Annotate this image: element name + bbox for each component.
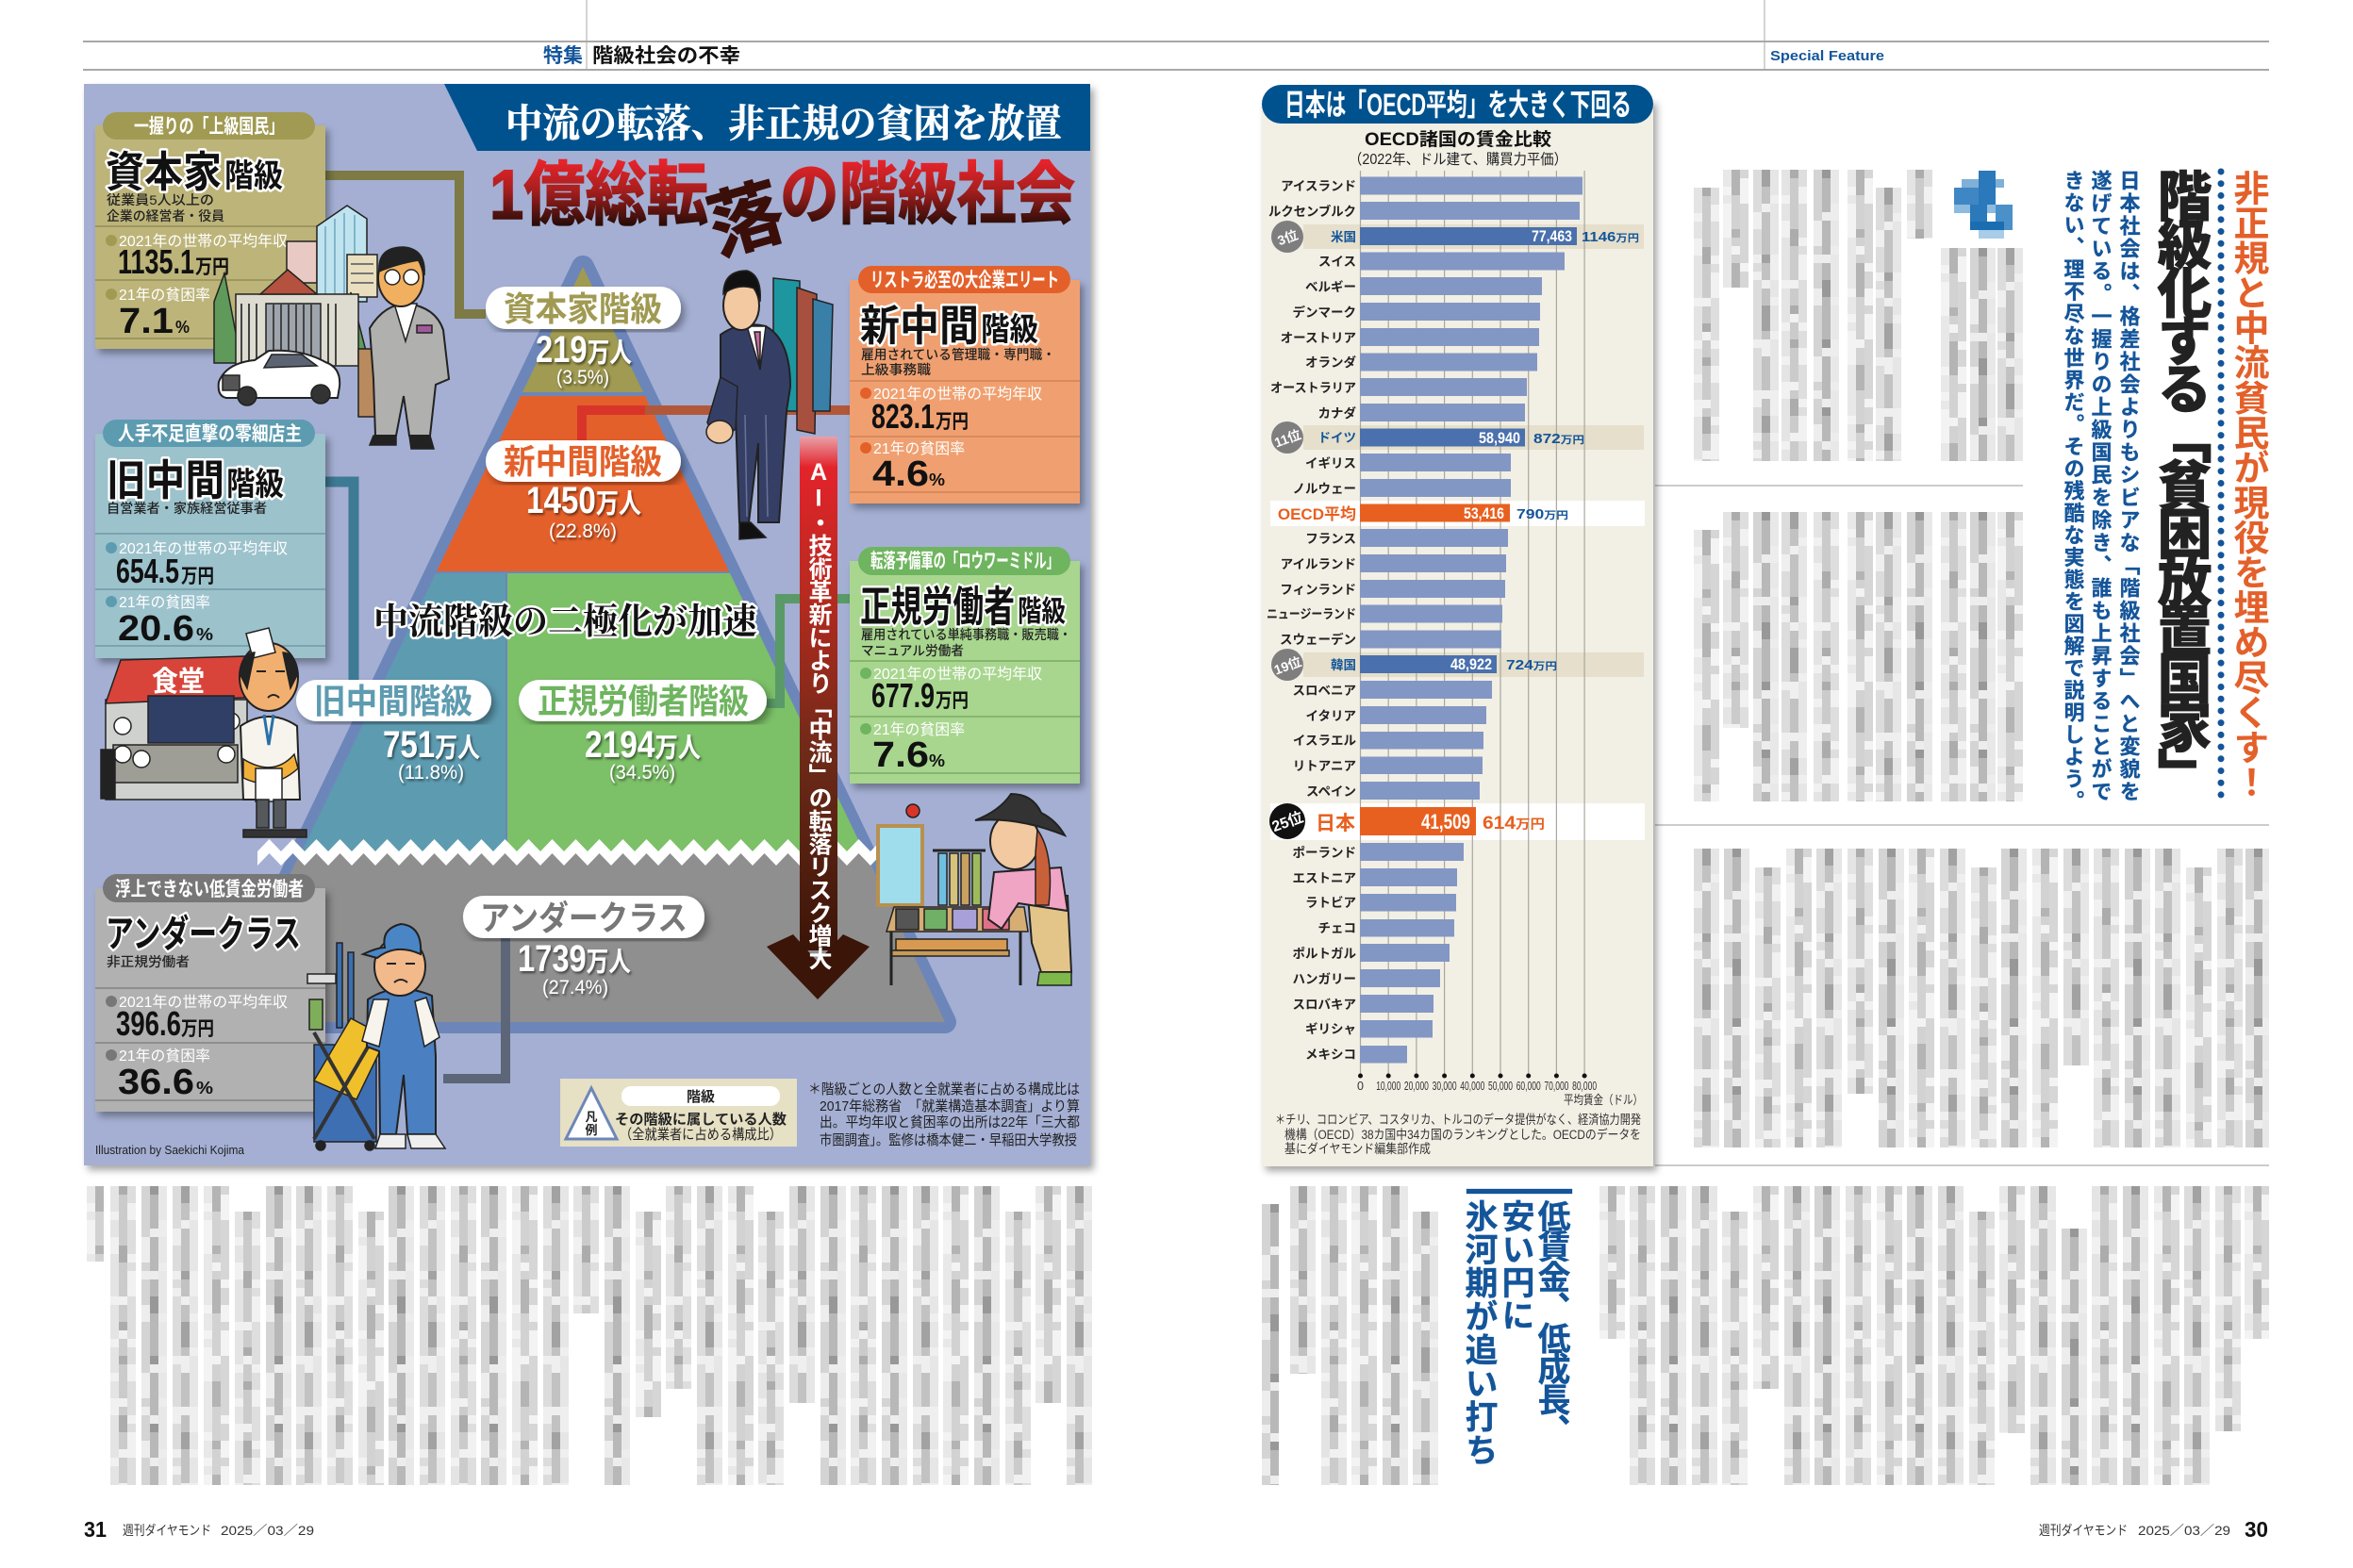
rule lines between article blocks bbox=[1655, 486, 2269, 1165]
axis: 30,000 bbox=[1433, 1080, 1457, 1093]
panel: new middle class: 823.1 bbox=[871, 397, 935, 436]
banner heading: 中流の転落、非正規の貧困を放置 bbox=[505, 102, 1062, 145]
arrow: AI risk of falling bbox=[767, 437, 870, 999]
panel: capitalist class: 資本家 bbox=[106, 148, 222, 196]
main title: 1億総転 bbox=[489, 156, 708, 234]
dotted divider bbox=[2218, 172, 2224, 803]
country labels: 日本 bbox=[1316, 813, 1355, 834]
subheading: 氷河期が追い打ち bbox=[1460, 1199, 1498, 1466]
highlighted values: 872 万円 bbox=[1533, 431, 1584, 447]
country labels: メキシコ bbox=[1305, 1048, 1356, 1062]
panel: old middle class: % bbox=[196, 625, 213, 644]
footnote: 市圏調査」。監修は橋本健二・早稲田大学教授 bbox=[820, 1132, 1077, 1148]
panel: new middle class: リストラ必至の大企業エリート bbox=[870, 270, 1059, 291]
footer left: 週刊ダイヤモンド bbox=[123, 1523, 211, 1538]
header: special feature: Special Feature bbox=[1770, 48, 1884, 64]
country labels: ハンガリー bbox=[1292, 972, 1356, 986]
illustration: woman selling clothes at a shop bbox=[878, 794, 1071, 985]
axis: 60,000 bbox=[1516, 1080, 1541, 1093]
chart title bbox=[1349, 129, 1567, 168]
legend bbox=[560, 1079, 797, 1147]
panel: capitalist class: 1135.1 bbox=[118, 242, 194, 281]
pyramid label: underclass: 1739万人 bbox=[518, 938, 631, 980]
country labels: エストニア bbox=[1292, 871, 1356, 885]
panel: underclass bbox=[95, 874, 325, 1112]
country labels: オーストリア bbox=[1281, 331, 1356, 345]
country labels bbox=[1267, 179, 1356, 1062]
chart banner: 日本は「OECD平均」を大きく下回る bbox=[1284, 88, 1632, 122]
headline: orange kicker: 非正規と中流貧民が現役を埋め尽くす！ bbox=[2228, 170, 2269, 800]
panel: underclass: 36.6 bbox=[118, 1063, 194, 1102]
illustration: capitalist with mansion and car bbox=[214, 206, 449, 449]
panel: capitalist class: 階級 bbox=[224, 158, 283, 194]
highlighted values: 77,463 bbox=[1532, 227, 1572, 245]
country labels: ラトビア bbox=[1305, 895, 1356, 910]
country labels: フランス bbox=[1305, 532, 1356, 546]
country labels: イスラエル bbox=[1293, 734, 1356, 748]
country labels: オーストラリア bbox=[1270, 381, 1356, 395]
chart title: （2022年、ドル建て、購買力平価） bbox=[1349, 151, 1567, 168]
panel: capitalist class: 一握りの「上級国民」 bbox=[134, 116, 284, 138]
connector lines bbox=[325, 175, 850, 1079]
panel: regular workers bbox=[850, 547, 1080, 784]
panel: underclass: 非正規労働者 bbox=[107, 954, 190, 969]
panel: underclass: % bbox=[196, 1079, 213, 1098]
country labels: ルクセンブルク bbox=[1268, 204, 1356, 219]
pyramid label: capitalist class bbox=[486, 287, 681, 388]
header: section tag: 特集 bbox=[543, 45, 583, 67]
footnote bbox=[808, 1081, 1080, 1148]
lead paragraph: 遂げている。一握りの上級国民を除き、誰も上昇することがで bbox=[2088, 170, 2113, 801]
subheading bbox=[1460, 1189, 1572, 1466]
panel: underclass: 396.6 bbox=[116, 1004, 181, 1043]
main title bbox=[489, 156, 1075, 270]
highlighted values: 614万円 bbox=[1483, 814, 1545, 834]
panel: regular workers: 677.9 bbox=[871, 676, 935, 715]
highlighted values: 48,922 bbox=[1450, 655, 1492, 673]
legend: （全就業者に占める構成比） bbox=[620, 1127, 782, 1143]
pyramid label: regular workers: 正規労働者階級 bbox=[538, 682, 749, 720]
panel: regular workers: 万円 bbox=[936, 690, 969, 712]
country labels: スペイン bbox=[1306, 784, 1356, 799]
rank badges: 3位 bbox=[1275, 227, 1300, 248]
panel: capitalist class: 従業員5人以上の bbox=[107, 192, 214, 207]
country labels: カナダ bbox=[1318, 405, 1356, 421]
panel: old middle class: 21年の貧困率 bbox=[119, 594, 210, 611]
pyramid label: old middle class: 旧中間階級 bbox=[314, 682, 472, 720]
page header bar bbox=[83, 0, 2269, 70]
pyramid label: new middle class: 1450万人 bbox=[526, 480, 641, 521]
pyramid label: regular workers bbox=[519, 680, 767, 784]
pyramid label: capitalist class: 219万人 bbox=[536, 329, 632, 371]
footer right: 週刊ダイヤモンド bbox=[2039, 1523, 2128, 1538]
pyramid label: old middle class bbox=[296, 680, 491, 784]
article text block, bottom left page (blurred) bbox=[87, 1186, 1092, 1485]
panel: old middle class: 階級 bbox=[226, 467, 284, 503]
footnote: ＊階級ごとの人数と全就業者に占める構成比は bbox=[808, 1081, 1080, 1098]
country labels: フィンランド bbox=[1280, 583, 1356, 597]
footer left: 31 bbox=[84, 1517, 107, 1542]
footnote: 2017年総務省 「就業構造基本調査」より算 bbox=[820, 1098, 1080, 1114]
chart title: OECD諸国の賃金比較 bbox=[1365, 129, 1551, 150]
illustration: shop owner at his diner: 食堂 bbox=[152, 667, 205, 698]
footer left bbox=[84, 1517, 314, 1542]
polarization caption: 中流階級の二極化が加速 bbox=[373, 602, 758, 642]
highlighted values: 53,416 bbox=[1464, 504, 1504, 522]
panel: capitalist class: 7.1 bbox=[119, 302, 174, 341]
pyramid label: new middle class bbox=[486, 440, 681, 542]
footer right: 30 bbox=[2245, 1517, 2268, 1542]
header: section title: 階級社会の不幸 bbox=[592, 45, 740, 67]
axis bbox=[1357, 1076, 1643, 1107]
country labels: ノルウェー bbox=[1292, 482, 1356, 496]
illustration: shop owner at his diner bbox=[101, 628, 307, 837]
panel: old middle class: 20.6 bbox=[118, 609, 194, 649]
highlight bands bbox=[1270, 224, 1645, 840]
lead paragraph: きない、理不尽な世界だ。その残酷な実態を図解で説明しよう。 bbox=[2062, 170, 2084, 811]
chart footnote bbox=[1275, 1112, 1641, 1156]
country labels: チェコ bbox=[1318, 921, 1356, 935]
article text block, bottom right page right part (blurred) bbox=[1599, 1186, 2269, 1485]
panel: new middle class: 万円 bbox=[936, 411, 969, 433]
highlighted values: 1146 万円 bbox=[1582, 229, 1639, 245]
legend: 階級 bbox=[687, 1089, 715, 1105]
banner heading bbox=[444, 84, 1090, 151]
subheading: 安い円に bbox=[1498, 1199, 1533, 1331]
panel: old middle class: 旧中間 bbox=[107, 456, 224, 504]
panel: old middle class: 人手不足直撃の零細店主 bbox=[118, 423, 302, 445]
panel: class society infographic bbox=[84, 84, 1090, 1165]
pyramid label: capitalist class: (3.5%) bbox=[556, 367, 609, 388]
legend: 例 bbox=[585, 1123, 598, 1137]
country labels: ベルギー bbox=[1305, 280, 1356, 294]
country labels: オランダ bbox=[1305, 355, 1356, 370]
headline: main title: 階級化する「貧困放置国家」 bbox=[2148, 168, 2212, 801]
country labels: イタリア bbox=[1306, 709, 1356, 723]
country labels: イギリス bbox=[1305, 456, 1356, 470]
footer left: 2025／03／29 bbox=[221, 1523, 314, 1538]
country labels: スイス bbox=[1318, 255, 1356, 269]
pyramid label: regular workers: 2194万人 bbox=[585, 724, 701, 766]
article text block, bottom right page left part (blurred) bbox=[1262, 1186, 1438, 1485]
axis: 50,000 bbox=[1488, 1080, 1513, 1093]
pyramid label: old middle class: (11.8%) bbox=[398, 762, 464, 784]
bar chart bbox=[1360, 177, 1582, 1064]
illustration: temp worker with cleaning cart bbox=[307, 924, 445, 1150]
panel: new middle class: 新中間 bbox=[860, 302, 979, 350]
chart footnote: 機構（OECD）38カ国中34カ国のランキングとした。OECDのデータを bbox=[1284, 1127, 1641, 1142]
country labels: OECD平均 bbox=[1278, 505, 1356, 523]
panel: new middle class: 雇用されている管理職・専門職・ bbox=[861, 347, 1055, 362]
panel: underclass: 21年の貧困率 bbox=[119, 1048, 210, 1065]
country labels: デンマーク bbox=[1292, 305, 1356, 320]
panel: underclass: アンダークラス bbox=[106, 914, 301, 955]
article text block, upper right (blurred) bbox=[1694, 170, 2023, 461]
panel: regular workers: 転落予備軍の「ロウワーミドル」 bbox=[870, 551, 1059, 572]
footnote: 出。平均年収と貧困率の出所は22年「三大都 bbox=[820, 1114, 1080, 1131]
axis: 70,000 bbox=[1544, 1080, 1568, 1093]
panel: old middle class: 654.5 bbox=[116, 552, 179, 590]
pyramid label: underclass: (27.4%) bbox=[542, 977, 608, 999]
drop cap (blurred) bbox=[1954, 171, 2013, 239]
panel: new middle class: 上級事務職 bbox=[861, 362, 931, 377]
panel: regular workers: 2021年の世帯の平均年収 bbox=[873, 666, 1042, 683]
panel: new middle class: % bbox=[929, 470, 945, 489]
panel: underclass: 浮上できない低賃金労働者 bbox=[115, 879, 304, 900]
pyramid label: capitalist class: 資本家階級 bbox=[504, 289, 662, 328]
panel: regular workers: 階級 bbox=[1018, 595, 1066, 628]
pyramid label: new middle class: 新中間階級 bbox=[504, 442, 662, 481]
rank badges: 19位 bbox=[1272, 653, 1303, 678]
highlighted values: 41,509 bbox=[1421, 810, 1470, 834]
pyramid label: old middle class: 751万人 bbox=[383, 724, 480, 766]
panel: old middle class: 2021年の世帯の平均年収 bbox=[119, 540, 288, 557]
country labels: アイスランド bbox=[1281, 179, 1356, 193]
panel: regular workers: 21年の貧困率 bbox=[873, 721, 965, 738]
panel: old middle class: 自営業者・家族経営従事者 bbox=[107, 501, 267, 516]
highlighted values: 58,940 bbox=[1479, 429, 1520, 447]
country labels: ポルトガル bbox=[1292, 947, 1356, 961]
pyramid label: new middle class: (22.8%) bbox=[549, 520, 617, 542]
panel: capitalist class: % bbox=[175, 318, 190, 337]
rank badges: 11位 bbox=[1272, 426, 1303, 450]
panel: old middle class bbox=[95, 420, 325, 658]
panel: new middle class bbox=[850, 266, 1080, 503]
panel: regular workers: 正規労働者 bbox=[860, 583, 1015, 631]
legend: その階級に属している人数 bbox=[615, 1111, 787, 1128]
illustration credit: Illustration by Saekichi Kojima bbox=[95, 1144, 244, 1157]
country labels: ポーランド bbox=[1292, 846, 1356, 860]
pyramid bbox=[221, 267, 945, 1022]
panel: underclass: 万円 bbox=[181, 1018, 214, 1040]
panel: capitalist class: 万円 bbox=[195, 256, 229, 278]
pyramid label: underclass bbox=[463, 896, 704, 999]
highlighted values bbox=[1421, 227, 1639, 834]
highlighted values: 724 万円 bbox=[1506, 657, 1557, 673]
panel: capitalist class bbox=[95, 112, 325, 349]
country labels: ギリシャ bbox=[1305, 1022, 1356, 1036]
lead paragraph: 日本社会は、格差社会よりもシビアな「階級社会」へと変貌を bbox=[2116, 170, 2141, 801]
panel: regular workers: マニュアル労働者 bbox=[861, 643, 964, 658]
article text block, middle right (blurred) bbox=[1694, 512, 2023, 801]
axis: 平均賃金（ドル） bbox=[1564, 1093, 1643, 1107]
panel: regular workers: 7.6 bbox=[872, 735, 929, 775]
country labels: ドイツ bbox=[1318, 431, 1356, 445]
pyramid label: underclass: アンダークラス bbox=[480, 899, 688, 937]
panel: OECD wage chart bbox=[1262, 85, 1653, 1166]
rank badges: 25位 bbox=[1269, 809, 1305, 835]
country labels: スウェーデン bbox=[1280, 632, 1356, 647]
panel: new middle class: 2021年の世帯の平均年収 bbox=[873, 386, 1042, 403]
panel: regular workers: 雇用されている単純事務職・販売職・ bbox=[861, 627, 1071, 642]
axis: 80,000 bbox=[1572, 1080, 1597, 1093]
panel: new middle class: 4.6 bbox=[872, 454, 929, 494]
pyramid label: regular workers: (34.5%) bbox=[609, 762, 675, 784]
chart footnote: ＊チリ、コロンビア、コスタリカ、トルコのデータ提供がなく、経済協力開発 bbox=[1275, 1112, 1641, 1127]
panel: new middle class: 21年の貧困率 bbox=[873, 440, 965, 457]
country labels: アイルランド bbox=[1281, 557, 1356, 571]
subheading: 低賃金、低成長、 bbox=[1533, 1199, 1570, 1446]
axis: 20,000 bbox=[1404, 1080, 1429, 1093]
panel: old middle class: 万円 bbox=[181, 566, 214, 587]
footer right: 2025／03／29 bbox=[2138, 1523, 2230, 1538]
panel: new middle class: 階級 bbox=[981, 312, 1038, 348]
country labels: リトアニア bbox=[1293, 759, 1356, 773]
country labels: ニュージーランド bbox=[1267, 607, 1356, 621]
panel: capitalist class: 企業の経営者・役員 bbox=[107, 208, 224, 223]
main title: 落 bbox=[700, 170, 793, 270]
lead paragraph bbox=[2062, 170, 2141, 811]
axis: 10,000 bbox=[1376, 1080, 1400, 1093]
grid lines bbox=[1360, 171, 1584, 1076]
arrow: AI risk of falling: AI・技術革新により「中流」の転落リスク増大 bbox=[805, 459, 832, 970]
main title: の階級社会 bbox=[780, 157, 1075, 233]
country labels: スロバキア bbox=[1292, 998, 1356, 1012]
legend: 凡 bbox=[585, 1110, 598, 1124]
article text block, lower right (blurred) bbox=[1694, 849, 2269, 1147]
country labels: 米国 bbox=[1331, 229, 1356, 244]
panel: underclass: 2021年の世帯の平均年収 bbox=[119, 994, 288, 1011]
panel: capitalist class: 21年の貧困率 bbox=[119, 287, 210, 304]
panel: capitalist class: 2021年の世帯の平均年収 bbox=[119, 233, 288, 250]
rank badges bbox=[1269, 221, 1305, 839]
panel: regular workers: % bbox=[929, 751, 945, 770]
country labels: スロベニア bbox=[1292, 684, 1356, 698]
chart footnote: 基にダイヤモンド編集部作成 bbox=[1284, 1141, 1431, 1156]
axis: 40,000 bbox=[1460, 1080, 1484, 1093]
axis: 0 bbox=[1357, 1080, 1364, 1093]
highlighted values: 790 万円 bbox=[1516, 506, 1568, 522]
country labels: 韓国 bbox=[1331, 657, 1356, 672]
footer right bbox=[2039, 1517, 2268, 1542]
chart banner bbox=[1262, 85, 1653, 124]
illustration: worried business elite with company books bbox=[706, 271, 833, 539]
